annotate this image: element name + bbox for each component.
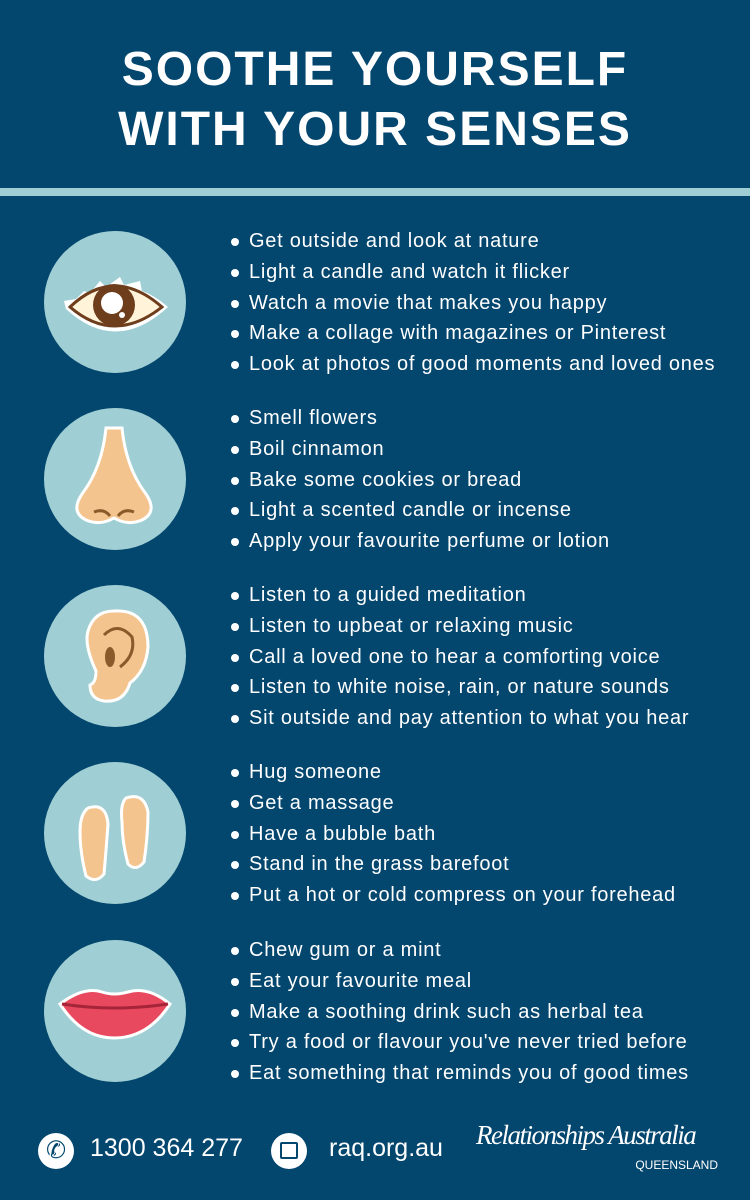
icon: lips [44, 940, 186, 1082]
list: hearing: Listen to a guided meditation [249, 584, 526, 606]
list: sight [231, 230, 715, 375]
list: touch: Hug someone [249, 761, 382, 783]
logo: Relationships Australia [476, 1120, 695, 1150]
title [118, 43, 632, 156]
list: smell: Boil cinnamon [249, 438, 384, 460]
icon: ear [44, 585, 186, 727]
list: sight: Look at photos of good moments and loved ones [249, 353, 715, 375]
list: taste [231, 939, 689, 1084]
list: taste: Eat your favourite meal [249, 970, 472, 992]
list: hearing: Listen to upbeat or relaxing music [249, 615, 574, 637]
icon: eye [44, 231, 186, 373]
title: SOOTHE YOURSELF [122, 43, 628, 96]
icon: feet [44, 762, 186, 904]
list: sight: Light a candle and watch it flicker [249, 261, 570, 283]
list: smell [231, 407, 610, 552]
list: sight: Watch a movie that makes you happy [249, 292, 607, 314]
list: taste: Try a food or flavour you've never tried before [249, 1031, 688, 1053]
list: smell: Smell flowers [249, 407, 378, 429]
list: taste: Chew gum or a mint [249, 939, 441, 961]
list: sight: Make a collage with magazines or Pinterest [249, 322, 666, 344]
list: touch: Get a massage [249, 792, 394, 814]
footer [38, 1120, 718, 1172]
logo [476, 1120, 718, 1172]
icon: nose [44, 408, 186, 550]
list: hearing: Listen to white noise, rain, or nature sounds [249, 676, 670, 698]
list: smell: Bake some cookies or bread [249, 469, 522, 491]
list: taste: Make a soothing drink such as herbal tea [249, 1001, 644, 1023]
list: hearing: Call a loved one to hear a comforting voice [249, 646, 660, 668]
icon: computer [271, 1133, 307, 1169]
logo: QUEENSLAND [635, 1158, 718, 1172]
list: hearing [231, 584, 689, 729]
list: hearing: Sit outside and pay attention to what you hear [249, 707, 689, 729]
icon: phone: ✆ [46, 1137, 66, 1164]
website: raq.org.au [329, 1134, 443, 1162]
list: touch: Have a bubble bath [249, 823, 436, 845]
list: touch: Put a hot or cold compress on your forehead [249, 884, 676, 906]
list: smell: Apply your favourite perfume or lotion [249, 530, 610, 552]
list: touch: Stand in the grass barefoot [249, 853, 509, 875]
list: touch [231, 761, 676, 906]
list: smell: Light a scented candle or incense [249, 499, 572, 521]
list: sight: Get outside and look at nature [249, 230, 539, 252]
icon: phone [38, 1133, 74, 1169]
list: taste: Eat something that reminds you of good times [249, 1062, 689, 1084]
title: WITH YOUR SENSES [118, 103, 632, 156]
phone number: 1300 364 277 [90, 1134, 243, 1162]
